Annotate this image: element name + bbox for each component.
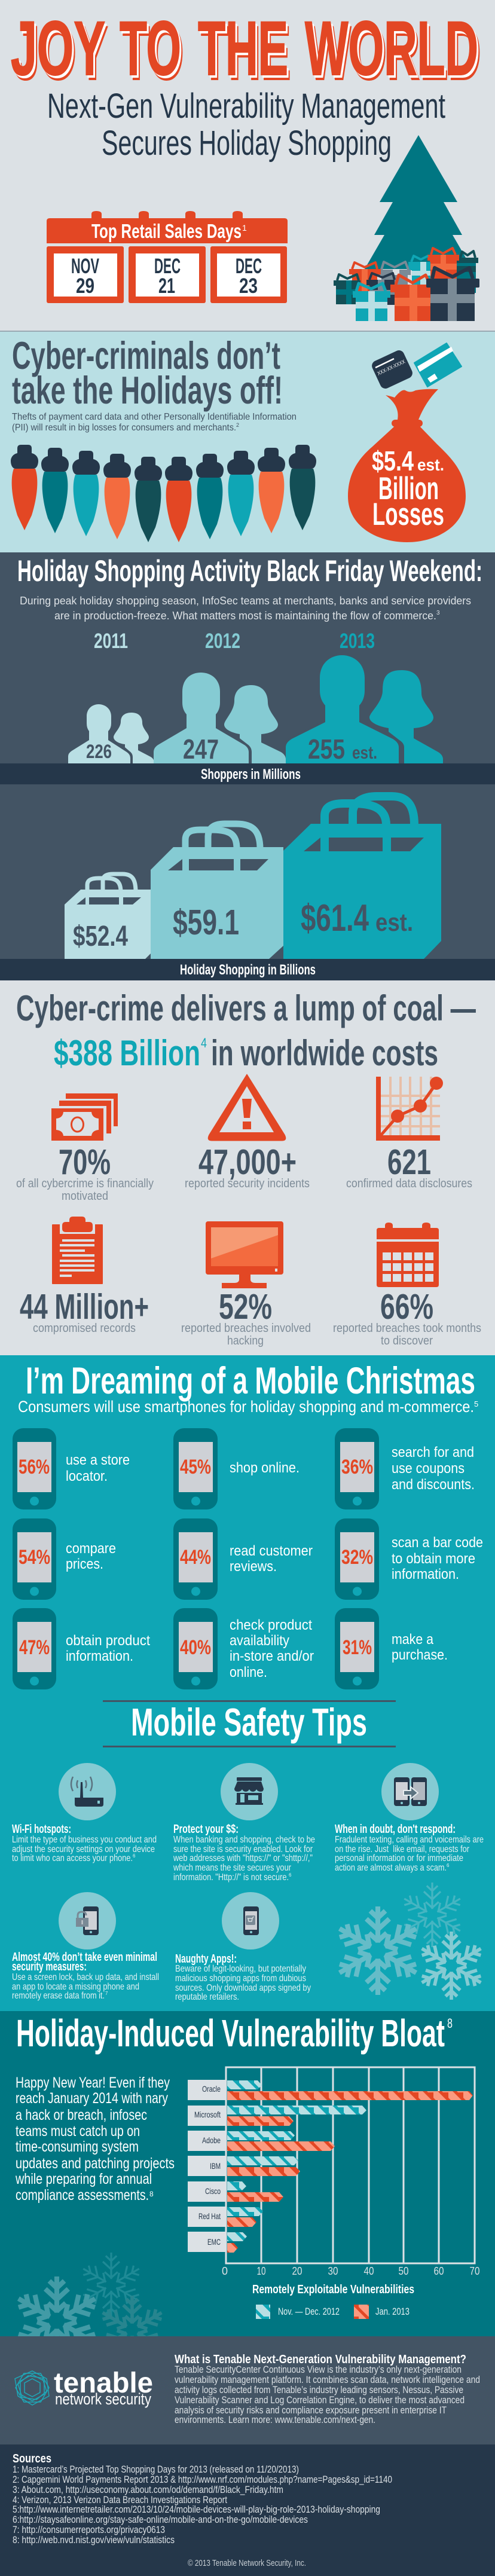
decoration: snowflakes: [13, 2253, 166, 2365]
phone stat: 32%: to obtain more: [392, 1551, 475, 1567]
tip: minimal security measures: Almost 40% don’t take even minimal: [12, 1951, 157, 1964]
phone stat: 32%: information.: [392, 1566, 459, 1582]
text block: [12, 412, 297, 433]
panel: vulnerability bloat: [0, 2011, 495, 2365]
stat: 66%: [333, 1223, 481, 1347]
tip: when in doubt: [335, 1763, 484, 1873]
bars: adobe: [188, 2131, 335, 2151]
bars: red hat: [188, 2207, 263, 2227]
phone stat: 47%: 47%: [19, 1636, 50, 1659]
text block: [175, 2353, 480, 2425]
phone stat: 40%: in-store and/or: [230, 1648, 314, 1664]
phone stat: 36%: use coupons: [392, 1460, 465, 1477]
stat: 44 million+: [20, 1217, 149, 1335]
phone stat: 36%: search for and: [392, 1444, 474, 1460]
stat: 70%: motivated: [62, 1190, 108, 1203]
panel: sources: [0, 2444, 495, 2576]
stat: 44 million+: compromised records: [33, 1322, 136, 1335]
source list: 4: Verizon, 2013 Verizon Data Breach Investigations Report: [13, 2494, 227, 2505]
axis labels: 0: [222, 2265, 228, 2277]
title: TO: [121, 8, 183, 94]
subtitle: [47, 87, 445, 163]
tip: naughty apps: sources. Only download apps signed by: [175, 1983, 311, 1993]
icon: money bag: Losses: [372, 497, 444, 532]
phone stat: 56%: locator.: [66, 1468, 108, 1484]
bars: adobe: Adobe: [202, 2135, 221, 2145]
tip: naughty apps: malicious shopping apps from dubious: [175, 1973, 306, 1984]
chart: shoppers in millions: [68, 655, 443, 765]
year labels: 2012: [205, 630, 240, 653]
panel: cyber-crime costs: [0, 980, 495, 1355]
icon: gift pile: [334, 248, 479, 321]
tip: when in doubt: action are almost always a scam.: [335, 1863, 447, 1873]
phone stat: 31%: purchase.: [392, 1647, 448, 1663]
phone stat: 44%: reviews.: [230, 1559, 277, 1575]
heading: [12, 334, 283, 412]
panel: holiday shopping activity: [0, 552, 495, 980]
legend: [256, 2305, 410, 2319]
chart: holiday shopping in billions: [65, 796, 441, 959]
text block: During peak holiday shopping season, InfoSec teams at merchants, banks and service providers: [20, 595, 471, 607]
text block: Happy New Year! Even if they: [16, 2074, 170, 2091]
source list: 5:http://www.internetretailer.com/2013/10/24/mobile-devices-will-play-big-role-2013-holiday-shopping: [13, 2504, 380, 2515]
phone stat: 44%: read customer: [230, 1543, 313, 1559]
text block: updates and patching projects: [16, 2155, 175, 2172]
axis labels: 60: [434, 2265, 444, 2277]
text block: a hack or breach, infosec: [16, 2107, 147, 2123]
heading: Sources: [13, 2452, 51, 2465]
bars: oracle: Oracle: [202, 2084, 221, 2094]
source list: 3: About.com, http://useconomy.about.com/od/demand/f/Black_Friday.htm: [13, 2484, 283, 2495]
phone stat: 45%: 45%: [180, 1456, 211, 1478]
stat: 66%: reported breaches took months: [333, 1322, 481, 1335]
text block: time-consuming system: [16, 2138, 139, 2155]
heading: 8: [447, 2016, 453, 2031]
stat: 70%: of all cybercrime is financially: [16, 1177, 154, 1190]
phone stat: 47%: [13, 1608, 150, 1689]
tip: minimal security measures: 7: [105, 1991, 108, 1996]
axis labels: 50: [398, 2265, 409, 2277]
source list: [13, 2464, 392, 2546]
tip: minimal security measures: security measures:: [12, 1960, 87, 1973]
stat: 52%: [181, 1221, 311, 1347]
calendar: top retail sales days: DEC: [236, 255, 262, 278]
chart: holiday shopping in billions: $59.1: [173, 903, 239, 942]
phone stat: 56%: [13, 1428, 130, 1509]
chart: shoppers in millions: 255: [308, 734, 345, 765]
axis title: Remotely Exploitable Vulnerabilities: [252, 2283, 414, 2296]
axis labels: [222, 2265, 479, 2277]
axis labels: 20: [292, 2265, 302, 2277]
icon: phone with cart: [222, 1892, 279, 1949]
phone stat: 40%: availability: [230, 1633, 289, 1649]
stat: 70%: [16, 1093, 154, 1203]
tip: protect your money: 6: [289, 1872, 292, 1878]
icon: money bag: est.: [417, 456, 444, 474]
phone stat: 56%: use a store: [66, 1452, 130, 1468]
source list: 2: Capgemini World Payments Report 2013 & http://www.nrf.com/modules.php?name=Pages&sp_id=1140: [13, 2474, 392, 2485]
stat: 52%: 52%: [219, 1287, 272, 1327]
logo: tenable: [54, 2367, 153, 2399]
panel: mobile christmas: [0, 1355, 495, 2011]
calendar: top retail sales days: 23: [239, 274, 258, 298]
legend: Jan. 2013: [375, 2306, 410, 2317]
phone stat: 54%: [13, 1518, 116, 1600]
tip: protect your money: sure the site is security enabled. Look for: [173, 1844, 313, 1854]
stat: 47,000+: [185, 1074, 310, 1190]
band: holiday shopping in billions: [0, 959, 495, 980]
heading: $388 Billion: [54, 1033, 200, 1073]
bars: microsoft: Microsoft: [194, 2110, 221, 2119]
text block: 3: [436, 610, 440, 616]
bars: ibm: IBM: [210, 2161, 221, 2171]
stat: 66%: 66%: [380, 1287, 433, 1327]
icon: money bag: [348, 389, 466, 542]
tip: minimal security measures: Use a screen lock, back up data, and install: [12, 1972, 159, 1982]
phone stat: 40%: 40%: [180, 1636, 211, 1659]
year labels: 2011: [94, 630, 128, 653]
tip: naughty apps: reputable retailers.: [175, 1992, 239, 2002]
stat: 621: 621: [387, 1142, 431, 1182]
icon: string of lights: [11, 445, 316, 542]
icon: money bag: $5.4: [372, 445, 414, 476]
icon: clipboard: [52, 1217, 103, 1284]
phone stat: 44%: [173, 1518, 313, 1600]
year labels: [94, 630, 375, 653]
stat: 621: confirmed data disclosures: [346, 1177, 472, 1190]
phone stat: 47%: information.: [66, 1648, 133, 1664]
phone stat: 40%: [173, 1608, 314, 1689]
chart: holiday shopping in billions: $61.4: [301, 897, 369, 939]
phone stat: 31%: [335, 1608, 448, 1689]
legend: Nov. — Dec. 2012: [278, 2306, 340, 2317]
phone stat: 47%: obtain product: [66, 1633, 150, 1649]
tip: protect your money: Protect your $$:: [173, 1823, 239, 1836]
decoration: snowflakes: [334, 1883, 485, 2000]
text block: while preparing for annual: [15, 2171, 152, 2187]
phone stat: 32%: [335, 1518, 483, 1600]
icon: id card: [370, 349, 414, 390]
bars: cisco: Cisco: [205, 2186, 221, 2196]
phone stat: 54%: prices.: [66, 1556, 103, 1572]
chart: holiday shopping in billions: est.: [375, 908, 413, 936]
icon: router: [59, 1763, 116, 1820]
panel: header: [0, 0, 495, 332]
calendar: top retail sales days: 21: [158, 274, 175, 298]
text block: [15, 2074, 175, 2204]
bars: emc: [188, 2232, 247, 2253]
chart: shoppers in millions: 226: [86, 741, 112, 762]
source list: 8: http://web.nvd.nist.gov/view/vuln/statistics: [13, 2534, 175, 2546]
text block: teams must catch up on: [16, 2123, 140, 2140]
text block: 2: [236, 422, 239, 428]
icon: two phones: [381, 1763, 439, 1820]
phone stat: 31%: 31%: [343, 1636, 372, 1659]
heading: [16, 988, 476, 1073]
heading: mobile safety tips: [103, 1700, 396, 1747]
tip: minimal security measures: remotely erase data from it.: [12, 1991, 105, 2001]
phone stat: 36%: and discounts.: [392, 1477, 475, 1493]
phone stat: 36%: 36%: [341, 1456, 373, 1478]
band: shoppers in millions: [0, 763, 495, 784]
source list: 6:http://staysafeonline.org/stay-safe-online/mobile-and-on-the-go/mobile-devices: [13, 2514, 308, 2525]
stat: 52%: reported breaches involved: [181, 1322, 311, 1335]
icon: credit card: [414, 343, 462, 387]
tip: protect your money: which means the site secures your: [173, 1863, 292, 1873]
logo: [15, 2367, 153, 2408]
phone stat: 32%: scan a bar code: [392, 1535, 483, 1551]
chart: shoppers in millions: 247: [183, 734, 219, 765]
chart: shoppers in millions: est.: [352, 743, 377, 763]
bars: ibm: [188, 2156, 300, 2176]
text block: 8: [149, 2190, 154, 2198]
tip: naughty apps: [175, 1892, 311, 2002]
title: THE: [201, 11, 291, 96]
source list: 7: http://consumerreports.org/privacy0613: [13, 2524, 165, 2535]
copyright: © 2013 Tenable Network Security, Inc.: [188, 2558, 306, 2568]
calendar: top retail sales days: DEC: [154, 255, 181, 278]
tip: protect your money: information. "Http://" is not secure.: [173, 1872, 289, 1883]
axis labels: 40: [363, 2265, 374, 2277]
phone stat: 40%: check product: [230, 1617, 312, 1633]
bars: emc: EMC: [207, 2237, 221, 2247]
title: JOY: [13, 8, 107, 94]
text block: Thefts of payment card data and other Personally Identifiable Information: [12, 412, 297, 422]
phone stat: 54%: compare: [66, 1541, 116, 1557]
source list: 1: Mastercard’s Projected Top Shopping Days for 2013 (released on 11/20/2013): [13, 2464, 299, 2475]
axis labels: 30: [328, 2265, 338, 2277]
band: shoppers in millions: Shoppers in Millions: [201, 766, 301, 783]
logo: network security: [55, 2390, 151, 2408]
calendar: top retail sales days: NOV: [71, 255, 99, 278]
stat: 70%: 70%: [59, 1142, 111, 1182]
text block: [20, 595, 471, 622]
axis labels: 10: [257, 2265, 265, 2277]
stat: 52%: hacking: [227, 1334, 264, 1347]
title: TO: [123, 11, 184, 96]
heading: mobile safety tips: Mobile Safety Tips: [131, 1700, 367, 1744]
panel: about tenable: [0, 2336, 495, 2444]
phone stat: 36%: [335, 1428, 475, 1509]
tip: naughty apps: Beware of legit-looking, but potentially: [175, 1964, 306, 1974]
title: THE: [198, 6, 288, 91]
phone stat: 32%: 32%: [341, 1546, 373, 1569]
calendar: top retail sales days: 29: [76, 274, 94, 298]
tip: wi-fi hotspots: Wi-Fi hotspots:: [12, 1823, 71, 1836]
tip: protect your money: [173, 1763, 315, 1883]
title: THE: [200, 8, 290, 94]
tip: minimal security measures: [12, 1892, 159, 2001]
icon: id card: XXX-XX-XXXX: [377, 359, 406, 377]
tip: protect your money: When banking and shopping, check to be: [173, 1835, 315, 1845]
phone stat: 45%: [173, 1428, 300, 1509]
stat: 47,000+: 47,000+: [198, 1142, 297, 1182]
tip: naughty apps: Naughty Apps!:: [175, 1952, 237, 1966]
icon: phone with lock: [59, 1892, 116, 1949]
tip: minimal security measures: an app to locate a missing phone and: [12, 1982, 139, 1992]
bars: microsoft: [188, 2106, 366, 2126]
text block: compliance assessments.: [16, 2187, 149, 2204]
calendar: top retail sales days: 1: [242, 223, 247, 233]
icon: store: [221, 1763, 278, 1820]
bars: red hat: Red Hat: [198, 2211, 221, 2221]
tip: when in doubt: personal information or for immediate: [335, 1853, 463, 1863]
icon: monitor: [206, 1221, 283, 1288]
title: JOY: [11, 6, 105, 91]
tip: wi-fi hotspots: Limit the type of business you conduct and: [12, 1835, 157, 1845]
phone stat: 40%: online.: [230, 1664, 267, 1680]
title: JOY: [14, 11, 108, 96]
tip: wi-fi hotspots: to limit who can access your phone.: [12, 1853, 133, 1863]
icon: christmas tree: [365, 135, 472, 269]
text block: reach January 2014 with nary: [16, 2090, 168, 2107]
stat: 66%: to discover: [381, 1334, 433, 1347]
phone stat: 54%: 54%: [19, 1546, 50, 1569]
phone stat: 56%: 56%: [19, 1456, 50, 1478]
icon: calendar: [377, 1223, 439, 1287]
axis labels: 70: [470, 2265, 479, 2277]
title: [11, 6, 481, 96]
text block: (PII) will result in big losses for consumers and merchants.: [12, 423, 236, 433]
heading: 4: [201, 1035, 207, 1050]
phone stat: 44%: 44%: [180, 1546, 211, 1569]
bars: oracle: [188, 2080, 473, 2100]
icon: money: [51, 1093, 118, 1141]
panel: cyber-criminals: [0, 332, 495, 552]
calendar: top retail sales days: [47, 211, 288, 303]
tip: when in doubt: 6: [447, 1863, 450, 1868]
year labels: 2013: [340, 630, 375, 653]
phone stat: 31%: make a: [392, 1631, 434, 1648]
heading: take the Holidays off!: [12, 368, 283, 412]
bars: cisco: [188, 2181, 283, 2202]
chart: remotely exploitable vulnerabilities: [188, 2067, 479, 2319]
stat: 621: [346, 1077, 472, 1190]
stat: 47,000+: reported security incidents: [185, 1177, 310, 1190]
tip: wi-fi hotspots: 6: [133, 1853, 136, 1859]
title: TO: [120, 6, 181, 91]
heading: Cyber-criminals don’t: [12, 334, 280, 377]
icon: warning: [208, 1074, 286, 1141]
text block: are in production-freeze. What matters most is maintaining the flow of commerce.: [54, 610, 436, 622]
text block: environments. Learn more: www.tenable.com/next-gen.: [175, 2414, 375, 2425]
tip: wi-fi hotspots: adjust the security settings on your device: [12, 1844, 155, 1854]
tip: wi-fi hotspots: [12, 1763, 157, 1863]
icon: money bag: Billion: [378, 471, 439, 506]
icon: line chart: [376, 1077, 443, 1141]
tip: protect your money: web addresses with "https://" or "shttp://,": [173, 1853, 313, 1863]
stat: 44 million+: 44 Million+: [20, 1287, 149, 1327]
band: holiday shopping in billions: Holiday Shopping in Billions: [180, 962, 316, 978]
subheading: 5: [474, 1399, 478, 1408]
calendar: top retail sales days: Top Retail Sales Days: [91, 220, 242, 242]
chart: holiday shopping in billions: $52.4: [73, 921, 128, 952]
phone stat: 45%: shop online.: [230, 1460, 300, 1476]
